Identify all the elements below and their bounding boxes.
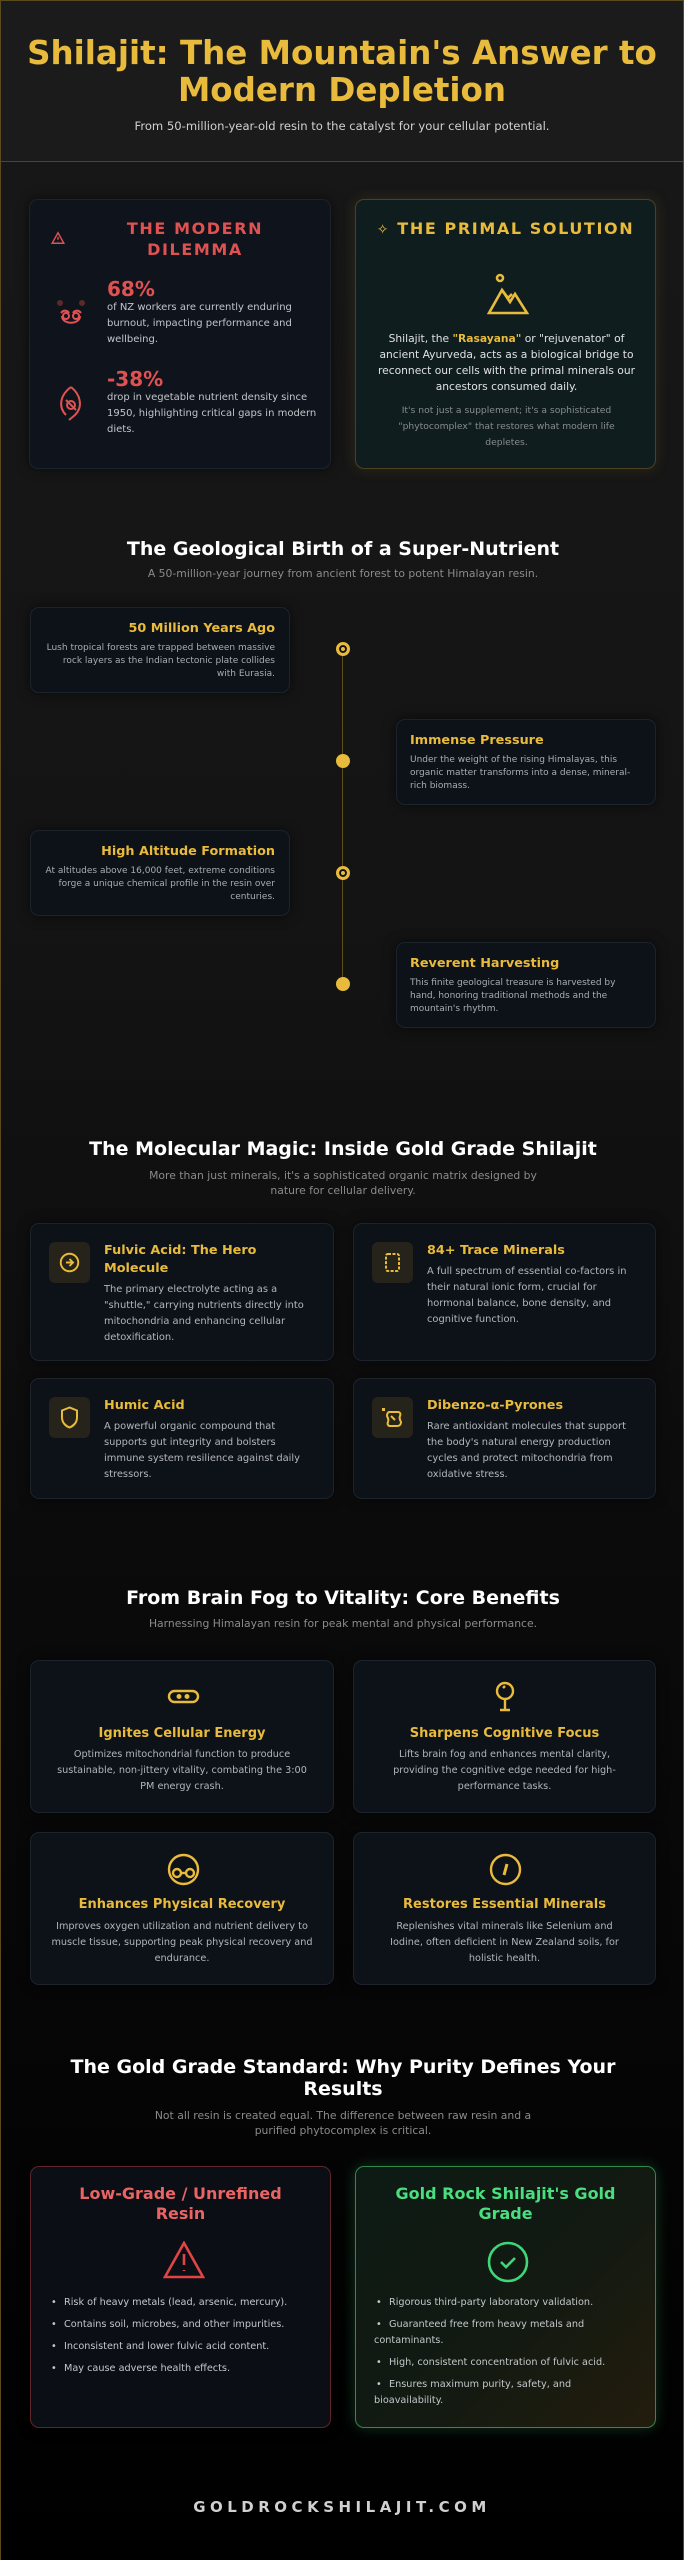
subtitle: geological: A 50-million-year journey from ancient forest to potent Himalayan resin. [148,567,538,580]
timeline card: 50 million years ago: 50 Million Years Ago [128,621,275,636]
list: gold grade benefits [374,2297,605,2406]
icon: arrow circle [49,1242,90,1283]
heading: gold grade [396,2184,616,2223]
benefit card: cognitive: Sharpens Cognitive Focus [410,1726,599,1741]
list: low grade risks: Contains soil, microbes, and other impurities. [64,2319,284,2330]
panel: low grade [30,2166,331,2428]
list: gold grade benefits: High, consistent concentration of fulvic acid. [389,2357,605,2368]
timeline dot 1 [336,642,350,656]
card: fulvic acid: Fulvic Acid: The Hero [104,1243,256,1258]
icon: lightbulb [496,1682,514,1712]
card: humic acid [30,1378,334,1499]
benefit card: energy [30,1660,334,1813]
list: low grade risks: May cause adverse health effects. [64,2363,230,2374]
benefit card: minerals: Restores Essential Minerals [403,1897,606,1912]
list: low grade risks: • [51,2341,57,2352]
panel: primal solution [355,199,656,469]
list: gold grade benefits: • [376,2357,382,2368]
list: gold grade benefits: Guaranteed free from heavy metals and contaminants. [374,2319,584,2346]
heading: modern dilemma: THE MODERN [127,219,263,238]
heading: low grade [79,2184,282,2223]
benefit card: energy: Optimizes mitochondrial function to produce sustainable, non-jittery vitality, combating the 3:00 PM energy crash. [57,1749,307,1792]
timeline [336,642,350,991]
heading: molecular magic: The Molecular Magic: Inside Gold Grade Shilajit [89,1138,597,1160]
icon: face glasses [168,1854,200,1886]
icon: shield [49,1397,90,1438]
icon: warning triangle [163,2241,205,2278]
subtitle: molecular: More than just minerals, it's a sophisticated organic matrix designed by nature for cellular delivery. [149,1169,537,1197]
benefit card: recovery: Enhances Physical Recovery [79,1897,285,1912]
stat: -38% [107,367,316,435]
panel: gold grade [355,2166,656,2428]
icon: burnout face [57,300,85,324]
timeline card: immense pressure: Under the weight of the rising Himalayas, this organic matter transforms into a dense, mineral-rich biomass. [410,755,630,791]
panel: modern dilemma [29,199,331,469]
list: gold grade benefits: • [376,2379,382,2390]
card: dibenzo-a-pyrones: Dibenzo-α-Pyrones [427,1398,563,1413]
heading: core benefits: From Brain Fog to Vitality: Core Benefits [126,1587,560,1609]
title [27,34,657,109]
icon: battery [168,1690,200,1704]
stat: 68% [107,277,292,345]
list: low grade risks [51,2297,287,2374]
timeline card: immense pressure [396,719,656,805]
heading: gold grade: Gold Rock Shilajit's Gold [396,2184,616,2203]
heading: modern dilemma: DILEMMA [147,240,243,259]
timeline card: reverent harvesting: This finite geological treasure is harvested by hand, honoring traditional methods and the mountain's rhythm. [410,978,615,1014]
card: fulvic acid: The primary electrolyte acting as a "shuttle," carrying nutrients directly into mitochondria and enhancing cellular detoxification. [104,1284,304,1343]
subtitle: benefits: Harnessing Himalayan resin for peak mental and physical performance. [149,1617,537,1630]
card: fulvic acid: Molecule [104,1261,168,1276]
benefit card: recovery [30,1832,334,1985]
timeline card: immense pressure: Immense Pressure [410,733,544,748]
timeline dot 3 [336,866,350,880]
icon: check circle [488,2242,528,2282]
header [1,1,683,162]
list: low grade risks: Inconsistent and lower fulvic acid content. [64,2341,269,2352]
text: primal body: Shilajit, the "Rasayana" or "rejuvenator" of ancient Ayurveda, acts as a biological bridge to reconnect our cells with the primal minerals our ancestors consumed daily. [378,332,635,393]
timeline card: reverent harvesting [396,942,656,1028]
timeline card: 50 million years ago: Lush tropical forests are trapped between massive rock layers as the Indian tectonic plate collides with Eurasia. [47,643,275,679]
card: trace minerals [353,1223,656,1361]
footer: website: GOLDROCKSHILAJIT.COM [193,2498,491,2516]
card: humic acid: A powerful organic compound that supports gut integrity and bolsters immune system resilience against daily stressors. [104,1421,300,1480]
benefit card: cognitive [353,1660,656,1813]
subtitle: gold grade: Not all resin is created equal. The difference between raw resin and a purified phytocomplex is critical. [155,2109,531,2137]
title: Modern Depletion [178,71,506,109]
timeline card: high altitude: At altitudes above 16,000 feet, extreme conditions forge a unique chemical profile in the resin over centuries. [45,866,275,902]
timeline card: high altitude [30,830,290,916]
heading: gold grade: Grade [478,2204,533,2223]
stat: 68%: 68% [107,277,155,301]
timeline dot 4 [336,977,350,991]
card: humic acid: Humic Acid [104,1398,185,1413]
list: low grade risks: • [51,2363,57,2374]
list: gold grade benefits: • [376,2319,382,2330]
stat: 68%: of NZ workers are currently enduring burnout, impacting performance and wellbeing. [107,302,292,345]
card: trace minerals: A full spectrum of essential co-factors in their natural ionic form, crucial for hormonal balance, bone density, and cognitive function. [427,1266,626,1325]
heading: low grade: Low-Grade / Unrefined [79,2184,282,2203]
benefit card: minerals: Replenishes vital minerals like Selenium and Iodine, often deficient in New Zealand soils, for holistic health. [390,1921,619,1964]
subtitle: From 50-million-year-old resin to the catalyst for your cellular potential. [134,119,550,133]
heading: gold grade standard: The Gold Grade Standard: Why Purity Defines Your [71,2056,615,2078]
card: dibenzo-a-pyrones [353,1378,656,1499]
icon: compass [490,1854,522,1886]
list: gold grade benefits: Rigorous third-party laboratory validation. [389,2297,593,2308]
icon: depleted leaf [60,386,81,421]
card: fulvic acid [30,1223,334,1361]
list: low grade risks: Risk of heavy metals (lead, arsenic, mercury). [64,2297,287,2308]
list: gold grade benefits: Ensures maximum purity, safety, and bioavailability. [374,2379,571,2406]
heading: primal solution: ✧ THE PRIMAL SOLUTION [377,219,634,238]
benefit card: cognitive: Lifts brain fog and enhances mental clarity, providing the cognitive edge needed for high-performance tasks. [393,1749,616,1792]
timeline card: reverent harvesting: Reverent Harvesting [410,956,559,971]
benefit card: energy: Ignites Cellular Energy [98,1726,265,1741]
benefit card: recovery: Improves oxygen utilization and nutrient delivery to muscle tissue, supporting peak physical recovery and endurance. [51,1921,312,1964]
card: trace minerals: 84+ Trace Minerals [427,1243,565,1258]
list: low grade risks: • [51,2319,57,2330]
icon: molecule [372,1397,413,1438]
icon: mountain [487,274,529,314]
list: low grade risks: • [51,2297,57,2308]
timeline dot 2 [336,754,350,768]
icon: mineral [372,1242,413,1283]
benefit card: minerals [353,1832,656,1985]
heading: gold grade standard [70,2056,616,2100]
stat: -38%: drop in vegetable nutrient density since 1950, highlighting critical gaps in modern diets. [107,392,316,435]
heading: modern dilemma [126,219,263,259]
timeline card: high altitude: High Altitude Formation [101,844,275,859]
card: dibenzo-a-pyrones: Rare antioxidant molecules that support the body's natural energy production cycles and protect mitochondria from oxidative stress. [427,1421,626,1480]
text: phytocomplex note: It's not just a supplement; it's a sophisticated "phytocomplex" that restores what modern life depletes. [398,405,615,448]
list: gold grade benefits: • [376,2297,382,2308]
timeline card: 50 million years ago [30,607,290,693]
stat: -38%: -38% [107,367,163,391]
title: Shilajit: The Mountain's Answer to [27,34,657,72]
heading: gold grade standard: Results [303,2078,383,2100]
heading: low grade: Resin [156,2204,205,2223]
icon: warning [51,231,65,244]
heading: geological birth: The Geological Birth of a Super-Nutrient [127,538,559,560]
